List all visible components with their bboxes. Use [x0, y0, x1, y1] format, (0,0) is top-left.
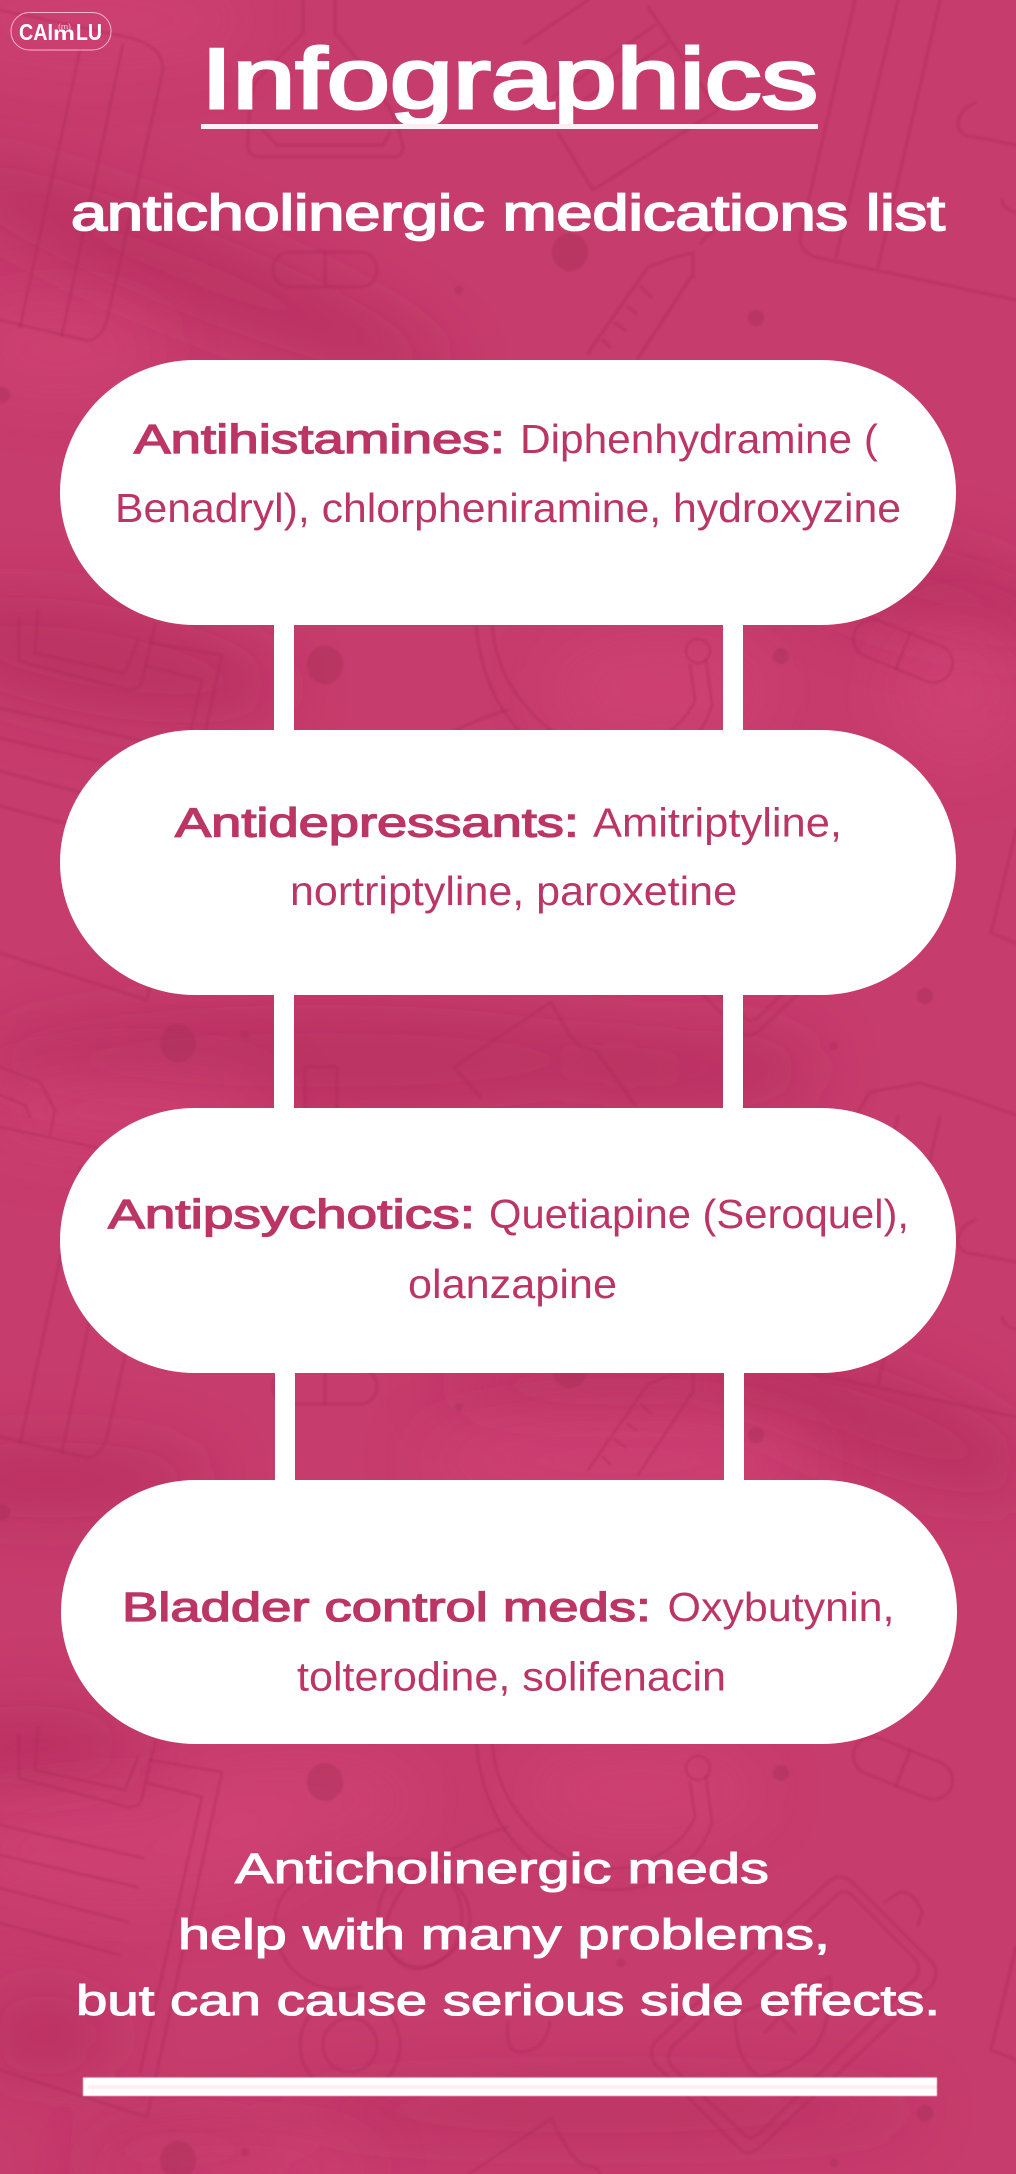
title with underline: Infographics	[201, 32, 818, 127]
panel: antidepressants: Antidepressants:	[175, 800, 579, 846]
panel: antidepressants: Amitriptyline,	[593, 800, 842, 846]
panel: antihistamines: Diphenhydramine (	[520, 416, 878, 462]
logo: LU	[76, 19, 102, 45]
logo: CAI	[19, 19, 53, 45]
background pattern: medical line icons, second tile	[0, 1117, 1016, 2174]
panel: antihistamines: Antihistamines:	[134, 416, 505, 462]
connector: pill 3 to pill 4	[275, 1368, 744, 1485]
panel: antihistamines: Benadryl), chlorpheniramine, hydroxyzine	[115, 485, 901, 531]
panel: antidepressants: nortriptyline, paroxetine	[290, 868, 737, 914]
closing statement: but can cause serious side effects.	[76, 1977, 940, 2025]
closing statement: help with many problems,	[178, 1911, 830, 1959]
bottom divider bar	[83, 2078, 937, 2096]
logo: m	[53, 24, 75, 45]
panel: antidepressants	[60, 730, 956, 995]
panel: antipsychotics	[60, 1108, 956, 1373]
panel: antipsychotics: Antipsychotics:	[108, 1191, 475, 1237]
closing statement	[76, 1845, 940, 2025]
logo: (m)	[58, 24, 71, 31]
closing statement: Anticholinergic meds	[235, 1845, 769, 1893]
panel: antipsychotics: Quetiapine (Seroquel),	[489, 1191, 909, 1237]
panel: antipsychotics: olanzapine	[408, 1261, 617, 1307]
panel: antihistamines	[60, 360, 956, 625]
logo	[11, 12, 111, 50]
panel: bladder control meds: Oxybutynin,	[668, 1584, 894, 1630]
connector: pill 1 to pill 2	[274, 620, 743, 735]
panel: bladder control meds: tolterodine, solifenacin	[297, 1654, 726, 1700]
panel: bladder control meds	[61, 1480, 957, 1744]
background pattern: medical line icons, first tile	[0, 0, 1016, 1135]
connector: pill 2 to pill 3	[274, 990, 743, 1113]
subtitle: anticholinergic medications list	[71, 185, 945, 241]
panel: bladder control meds: Bladder control meds:	[122, 1584, 651, 1630]
